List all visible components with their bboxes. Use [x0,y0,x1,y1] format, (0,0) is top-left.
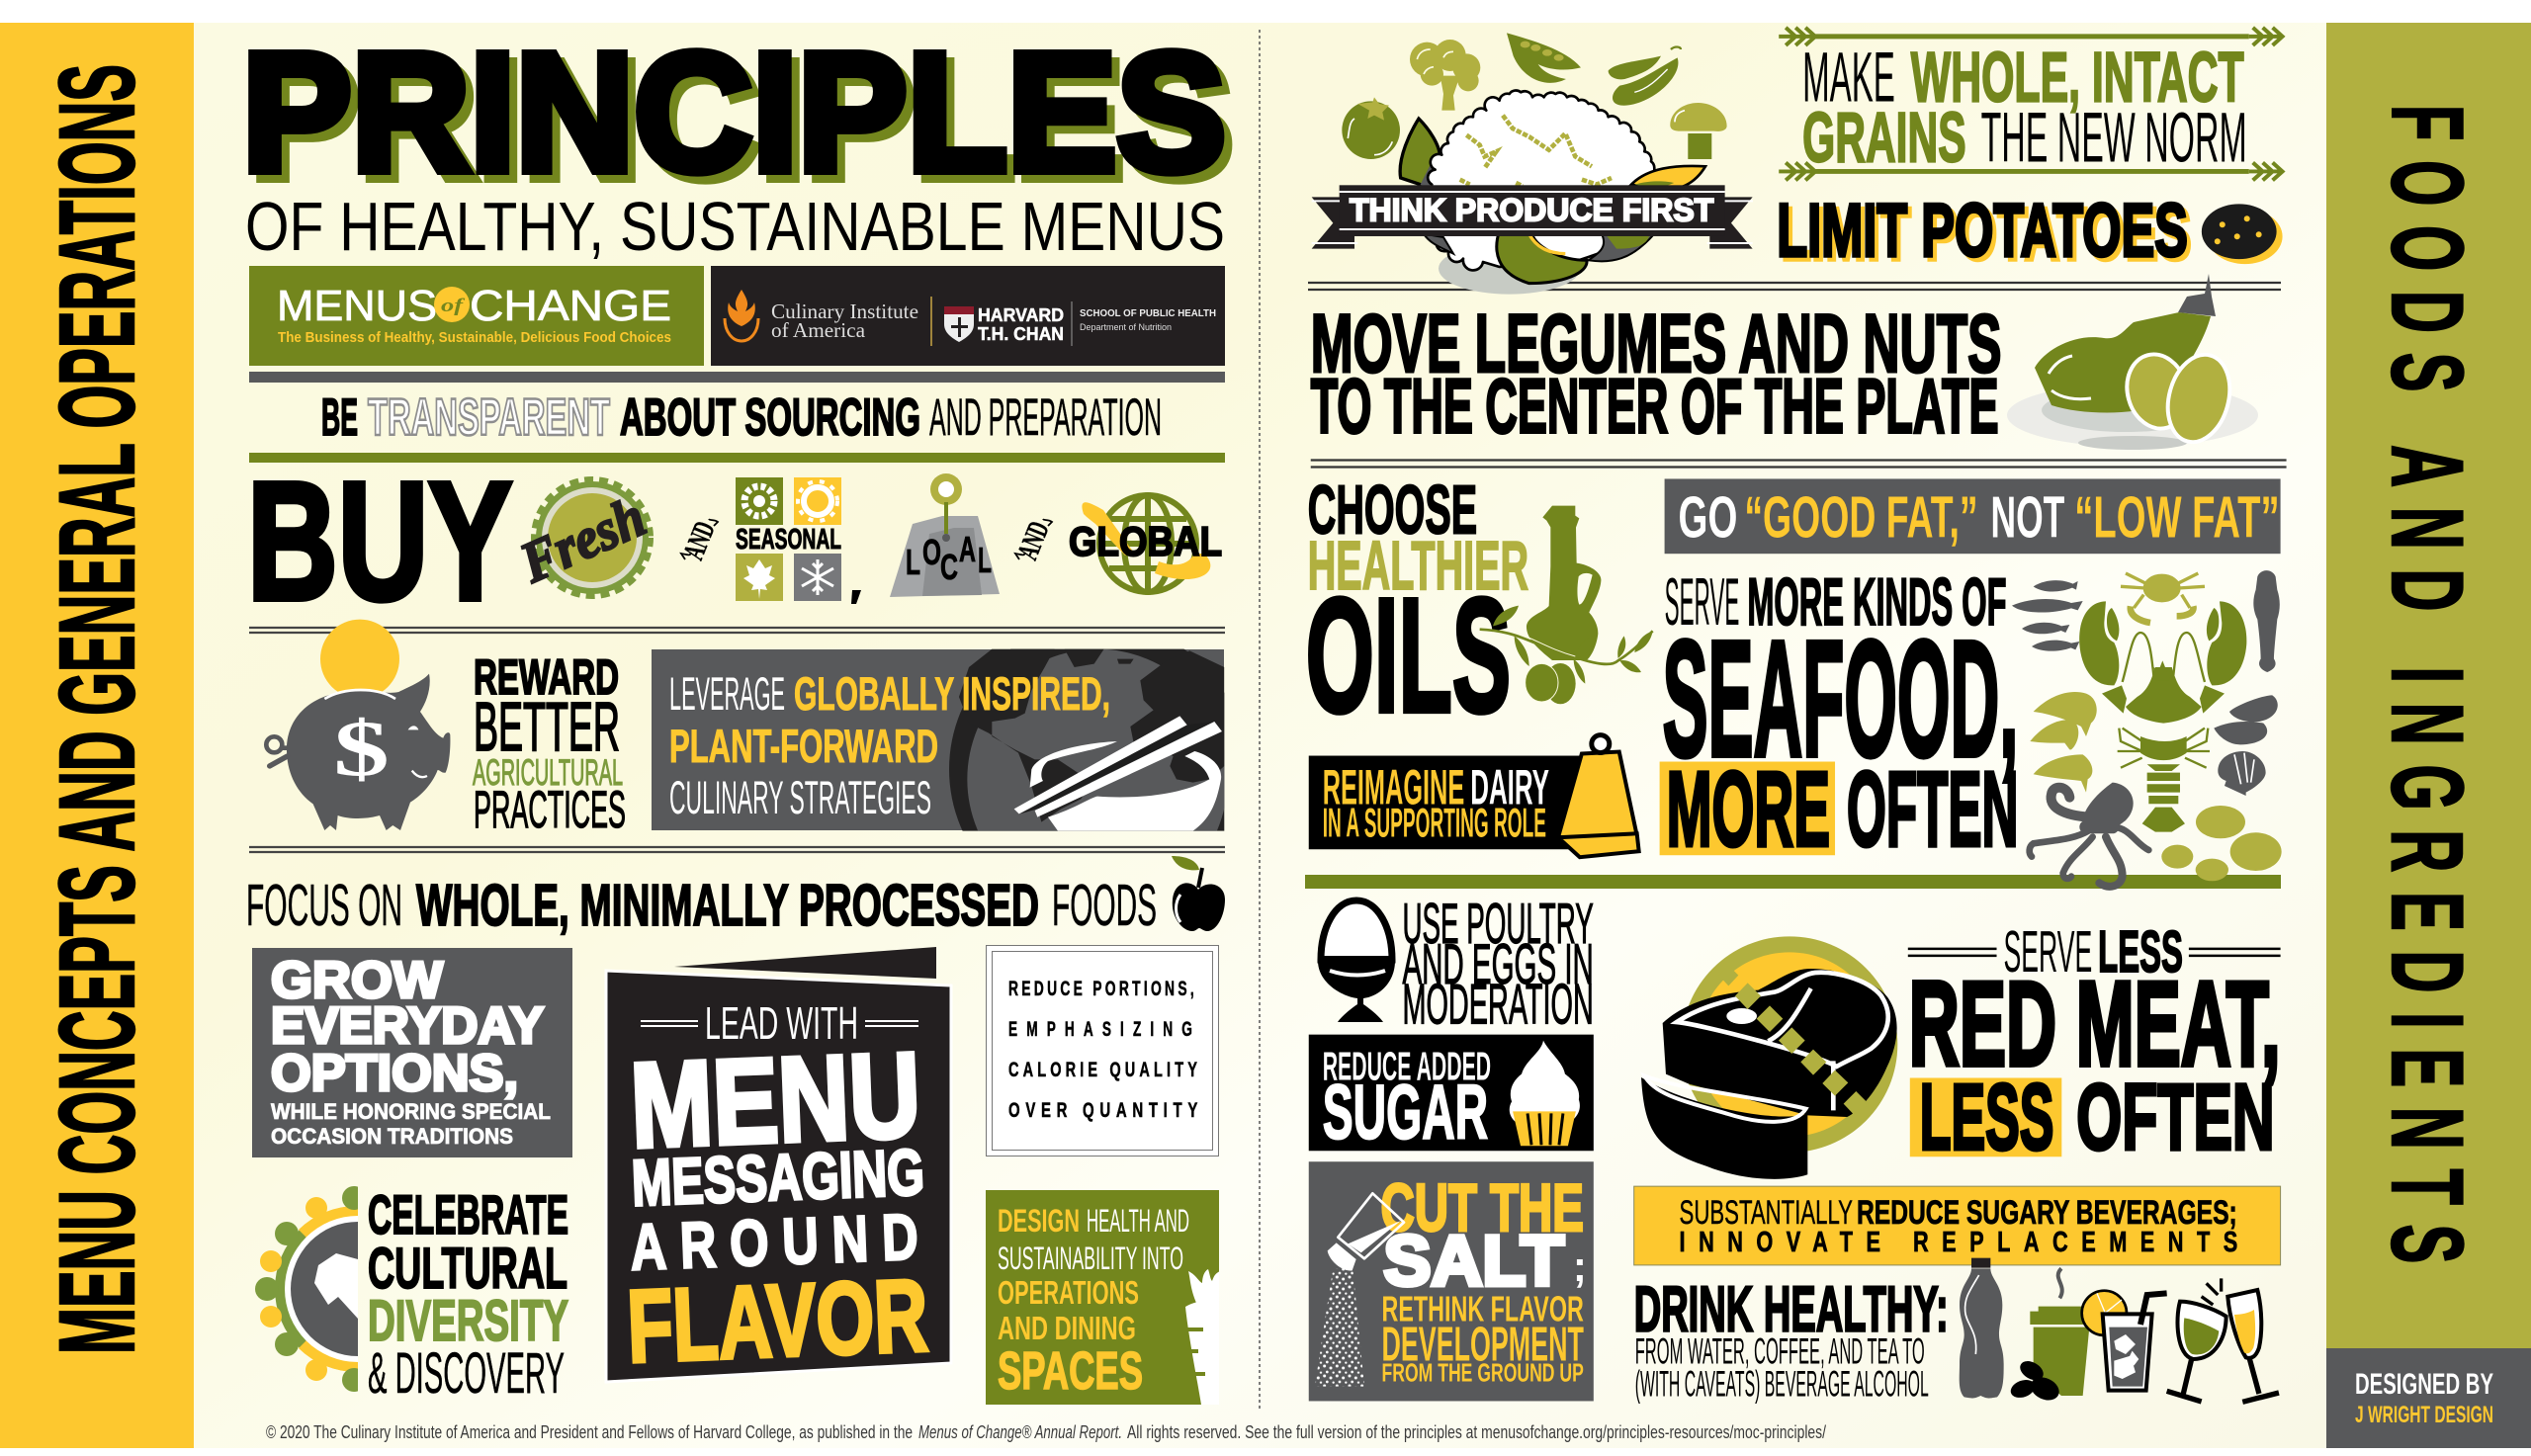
celebrate text: DIVERSITY [368,1289,568,1353]
healthier oils text: HEALTHIER [1308,527,1528,604]
celebrate text [368,1183,568,1406]
logo: menus of change [249,266,704,366]
less often: LESS [1920,1065,2053,1169]
world and bowl [949,648,1224,831]
transparency heading: ABOUT SOURCING [620,388,920,447]
ribbon banner: THINK PRODUCE FIRST [1350,193,1714,228]
right column text, scaled group: SEAFOOD, [1663,607,2018,792]
salt panel: FROM THE GROUND UP [1382,1360,1584,1388]
focus heading [246,873,1157,938]
right lower text, scaled group: FROM WATER, COFFEE, AND TEA TO [1635,1331,1925,1372]
whole grains text: GRAINS [1802,98,1966,177]
logo: cia and harvard: SCHOOL OF PUBLIC HEALTH [1080,308,1216,319]
reimagine dairy panel [1309,735,1639,857]
seafood text: MORE [1667,749,1830,868]
logo: cia and harvard: Department of Nutrition [1080,322,1172,332]
subtitle: OF HEALTHY, SUSTAINABLE MENUS [245,188,1225,265]
icon: piggy bank: $ [333,706,390,793]
panel: menu messaging: AROUND [629,1199,933,1284]
and flourish: AND [1011,517,1056,564]
celebrate text: CULTURAL [368,1237,567,1301]
panel: design health: DESIGN [998,1203,1080,1239]
rules [249,628,1225,633]
designer credit [2326,1348,2531,1448]
sugary beverages panel: REDUCE SUGARY BEVERAGES; [1857,1194,2237,1232]
drink icons [1960,1258,2279,1405]
panel: design health: SUSTAINABILITY INTO [998,1241,1183,1276]
serve less heading: LESS [2098,918,2183,985]
logo: menus of change: CHANGE [470,282,671,330]
icon: squid [2253,570,2280,672]
text: AND PREPARATION [929,388,1162,447]
icon: local mountain: C [940,547,958,587]
seafood text: SERVE [1665,565,1739,640]
footer copyright: Menus of Change® Annual Report. [918,1422,1122,1442]
panel: reduce portions [987,945,1218,1156]
ribbon banner [1312,185,1753,249]
serve less heading: SERVE [2003,918,2092,985]
panel: global plant-forward: CULINARY STRATEGIES [669,771,931,823]
panel: reduce portions: OVER QUANTITY [1008,1099,1203,1122]
panel: global plant-forward [652,648,1224,831]
panel: menu messaging: MESSAGING [631,1135,925,1220]
comma [851,590,861,604]
salt panel: DEVELOPMENT [1382,1319,1584,1372]
whole grains text [1802,39,2247,177]
reward better text: BETTER [474,688,620,765]
icon: legumes plate [2007,274,2258,450]
sugary beverages panel: SUBSTANTIALLY [1680,1194,1853,1232]
icon: cucumber [1609,46,1681,106]
rules [1311,461,2287,467]
icon: salt shaker and grains [1315,1193,1404,1387]
reward better text: AGRICULTURAL [473,752,623,793]
salt panel: SALT [1384,1222,1564,1301]
center dotted divider [1259,30,1261,1409]
icon: cultural gear [255,1186,358,1392]
buy heading: BUY [247,448,512,636]
good fat panel: “LOW FAT” [2074,483,2280,550]
salt panel: CUT THE [1381,1171,1584,1245]
healthier oils text: OILS [1306,564,1511,746]
panel: menu messaging: MENU [628,1027,922,1173]
title: principles: PRINCIPLES [242,19,1226,207]
panel: menu messaging: FLAVOR [625,1258,930,1385]
illustration: think produce first [1312,33,1753,295]
icon: cauliflower [1400,91,1705,295]
wheat rule bottom [1779,162,2283,180]
rule under produce [1308,283,2281,290]
transparency heading: BE [321,388,358,447]
icon: shrimps [2030,692,2097,793]
good fat panel: GO [1679,483,1737,550]
reimagine dairy panel: DAIRY [1470,759,1549,814]
right column lower text, scaled group [1309,893,1594,1401]
panel: design health [986,1190,1221,1405]
salt panel [1309,1161,1594,1401]
and flourish [1011,517,1056,564]
salt panel: RETHINK FLAVOR [1382,1290,1584,1329]
legumes heading: MOVE LEGUMES AND NUTS [1311,297,2002,389]
icon: fish [2012,580,2083,651]
icon: local mountain: O [922,532,941,572]
icon: water bottle [1960,1258,2004,1398]
icon: seasonal tiles [736,477,841,601]
salt panel: ; [1573,1242,1587,1291]
panel: menu messaging: LEAD WITH [705,997,858,1049]
seafood text [1660,565,2018,868]
transparency heading [321,388,1162,447]
sugar panel: REDUCE ADDED [1323,1043,1491,1088]
icon: potato [2202,204,2283,264]
text: USE POULTRY [1402,893,1594,956]
healthier oils text [1306,471,1528,746]
icon: tomato [1342,97,1400,159]
icon: wine and champagne glasses [2167,1278,2279,1402]
seafood text: MORE KINDS OF [1747,565,2006,640]
footer copyright [266,1422,1826,1442]
logo: menus of change: of [441,296,465,316]
less often [1910,1065,2275,1169]
panel: global plant-forward: PLANT-FORWARD [669,720,938,772]
panel: reduce portions: EMPHASIZING [1008,1018,1201,1041]
icon: fresh badge: Fresh [510,484,655,595]
whole grains text: WHOLE, INTACT [1911,39,2244,118]
transparency heading: TRANSPARENT [368,388,610,447]
drink healthy text: DRINK HEALTHY: [1634,1273,1949,1345]
panel: grow everyday options: GROW [271,952,444,1009]
legumes heading [1311,297,2002,450]
icon: coffee cup and beans [2008,1268,2093,1405]
reward better text: PRACTICES [474,781,626,839]
icon: carrot [1185,1269,1221,1405]
less often: OFTEN [2076,1065,2275,1169]
legumes heading: TO THE CENTER OF THE PLATE [1311,365,1999,450]
panel: design health: OPERATIONS [998,1274,1139,1311]
good fat panel [1665,478,2281,554]
icon: apple [1172,856,1225,931]
reimagine dairy panel: IN A SUPPORTING ROLE [1323,799,1546,845]
icon: global: GLOBAL [1069,518,1222,564]
panel: global plant-forward: LEVERAGE [669,667,785,720]
left sidebar [0,23,194,1448]
icon: octopus [2030,783,2148,887]
panel: global plant-forward: GLOBALLY INSPIRED, [794,667,1110,720]
good fat panel: NOT [1991,483,2064,550]
poultry and eggs text: AND EGGS IN [1402,933,1594,996]
logo: menus of change: The Business of Healthy, Sustainable, Delicious Food Choices [278,330,671,346]
icon: seasonal tiles: SEASONAL [736,524,841,556]
icon: broccoli [1410,40,1480,111]
icon: global [1069,494,1222,593]
panel: grow everyday options: OCCASION TRADITIONS [271,1124,513,1149]
icon: t-bone steak [1641,936,1897,1179]
serve less heading [1908,918,2281,985]
sugar panel: SUGAR [1323,1070,1488,1155]
panel: design health: SPACES [998,1341,1143,1401]
logo: cia and harvard: of America [771,318,866,342]
sugar panel [1309,1035,1594,1155]
icon: cowbell [1558,735,1639,857]
panel: menu messaging [606,947,951,1385]
poultry and eggs text [1402,893,1594,1037]
logo: cia and harvard: Culinary Institute [771,300,918,323]
red meat: RED MEAT, [1909,957,2281,1091]
drink healthy text [1634,1273,1949,1404]
icon: egg cup [1318,900,1395,1022]
right column text, scaled group [1306,28,2287,868]
icon: pea pod [1507,33,1581,83]
rules [249,847,1225,852]
right column text, scaled group: THE NEW NORM [1981,98,2247,177]
panel: grow everyday options [252,948,572,1157]
icon: oil bottle and olives [1480,506,1653,704]
icon: local mountain: L [906,542,920,582]
healthier oils text: CHOOSE [1308,471,1477,548]
panel: grow everyday options: EVERYDAY [271,997,544,1055]
limit potatoes: LIMIT POTATOES [1777,189,2188,273]
icon: cupcake [1510,1041,1580,1146]
whole grains text: MAKE [1802,39,1895,118]
focus heading: FOCUS ON [246,873,402,938]
and flourish: AND [677,517,722,564]
panel: grow everyday options: WHILE HONORING SPECIAL [271,1099,551,1124]
focus heading: WHOLE, MINIMALLY PROCESSED [416,873,1039,938]
icon: local mountain: A [959,529,976,569]
icon: local mountain [890,473,1000,597]
green divider [1305,875,2281,889]
logo: cia and harvard: T.H. CHAN [978,324,1064,344]
reward better text: REWARD [474,649,619,705]
sugary beverages panel: INNOVATE REPLACEMENTS [1680,1227,2251,1258]
panel: design health: HEALTH AND [1087,1203,1189,1239]
logo: cia and harvard [711,266,1225,366]
icon: shells [2161,695,2282,881]
panel: design health: AND DINING [998,1310,1136,1346]
seafood illustration [2012,570,2282,887]
panel: reduce portions: CALORIE QUALITY [1008,1059,1201,1081]
icon: mushroom [1670,103,1727,159]
reimagine dairy panel: REIMAGINE [1323,759,1464,814]
focus heading: FOODS [1052,873,1157,938]
celebrate text: & DISCOVERY [368,1341,565,1406]
and flourish [677,517,722,564]
icon: lobster [2079,601,2246,832]
logo: cia and harvard: HARVARD [978,305,1064,325]
logo: menus of change: MENUS [277,282,437,330]
right lower text, scaled group [1634,918,2281,1404]
right column text, scaled group: OFTEN [1847,749,2018,868]
footer copyright: © 2020 The Culinary Institute of America and President and Fellows of Harvard College, as published in the [266,1422,913,1442]
footer copyright: All rights reserved. See the full version of the principles at menusofchange.org/principles-resources/moc-principles/ [1127,1422,1826,1442]
text: MODERATION [1402,974,1594,1037]
sugary beverages panel [1634,1186,2281,1265]
celebrate text: CELEBRATE [368,1183,568,1245]
wheat rule top [1779,28,2283,45]
panel: reduce portions: REDUCE PORTIONS, [1008,978,1197,1000]
right lower text, scaled group: (WITH CAVEATS) BEVERAGE ALCOHOL [1635,1363,1929,1404]
panel: grow everyday options: OPTIONS, [271,1045,518,1102]
icon: local mountain: L [978,540,992,580]
icon: iced drink [2082,1291,2167,1391]
icon: crab [2121,573,2205,623]
right sidebar [2326,23,2531,1448]
icon: piggy bank [266,620,450,830]
reward better text [473,649,626,839]
good fat panel: “GOOD FAT,” [1744,483,1978,550]
